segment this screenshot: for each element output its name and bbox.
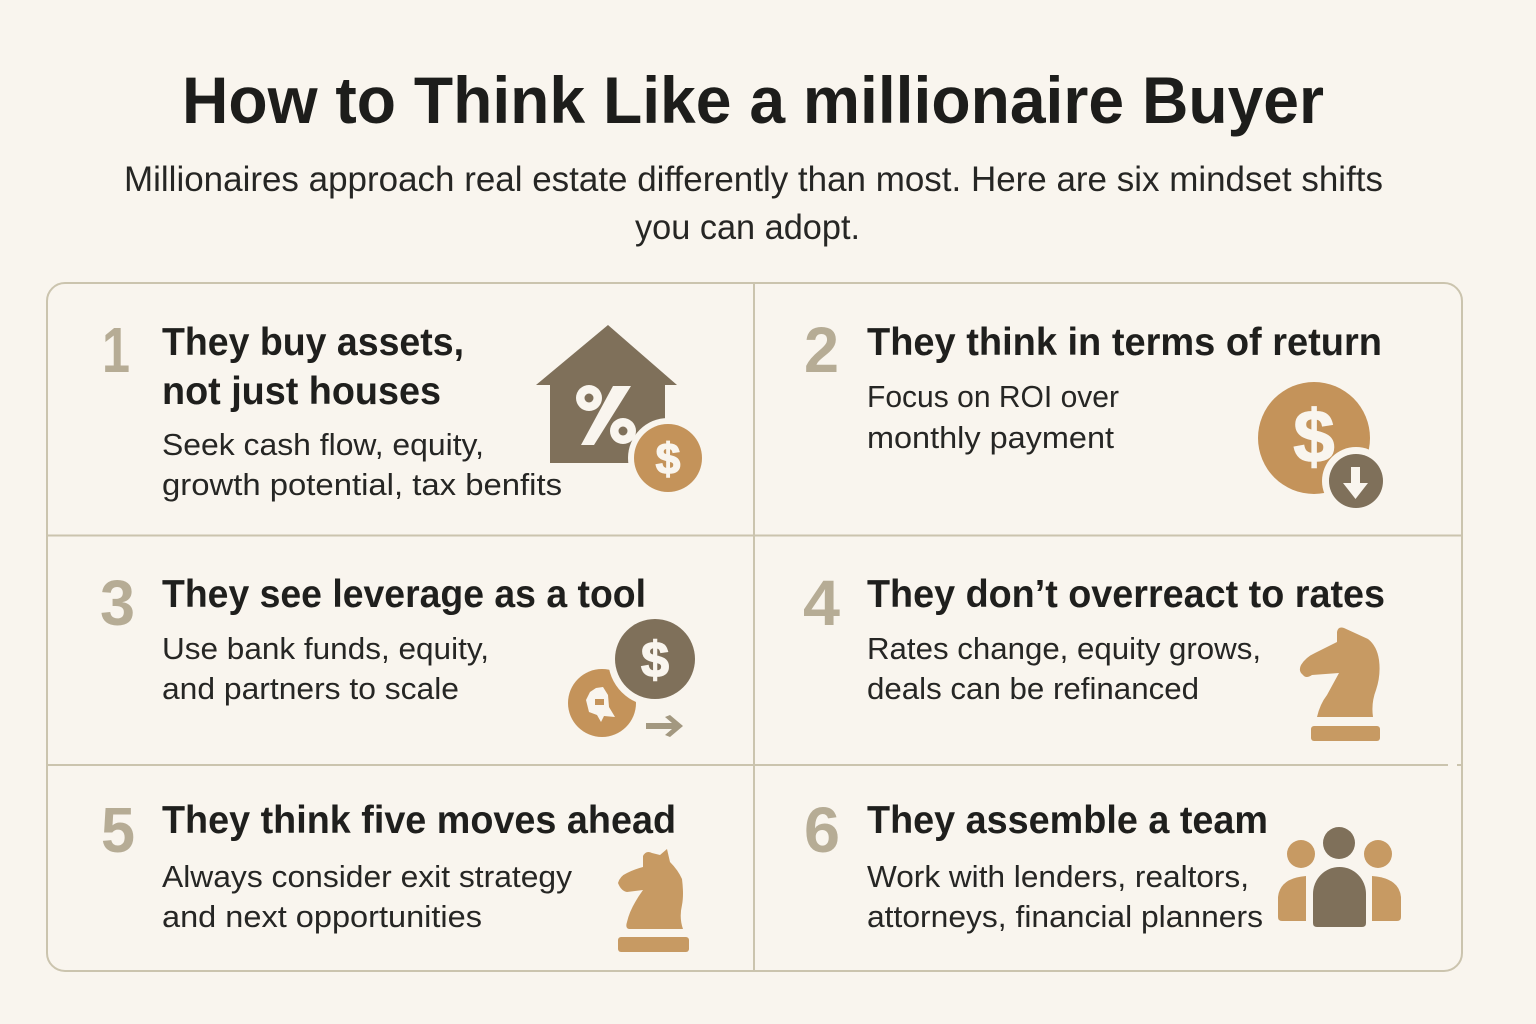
body 4: Rates change, equity grows,	[867, 631, 1261, 666]
icon: chess knight	[618, 849, 689, 952]
heading 1	[162, 321, 464, 413]
number 5: 5	[101, 794, 135, 866]
body 5: and next opportunities	[162, 899, 482, 934]
body 3: Use bank funds, equity,	[162, 631, 489, 666]
subtitle	[124, 160, 1383, 247]
icon: coin with down arrow	[1258, 382, 1390, 515]
number 4: 4	[803, 567, 840, 639]
panel 2: they think in terms of return	[804, 314, 1390, 515]
body 6: attorneys, financial planners	[867, 899, 1263, 934]
body 3: and partners to scale	[162, 671, 459, 706]
icon: two coins and arrow	[568, 612, 702, 737]
body 1: Seek cash flow, equity,	[162, 427, 484, 462]
body 5: Always consider exit strategy	[162, 859, 573, 894]
panel 4: they don't overreact to rates	[803, 567, 1385, 741]
body 4: deals can be refinanced	[867, 671, 1199, 706]
icon: team of three people	[1278, 827, 1401, 927]
subtitle: you can adopt.	[635, 208, 860, 247]
icon: house with percent and coin: $	[656, 435, 680, 484]
panel 3: they see leverage as a tool	[100, 567, 702, 737]
heading 2: They think in terms of return	[867, 321, 1382, 364]
number 2: 2	[804, 314, 839, 386]
icon: chess knight	[1300, 628, 1380, 741]
grid frame	[47, 283, 1462, 971]
body 2: monthly payment	[867, 420, 1114, 455]
heading 6: They assemble a team	[867, 799, 1268, 842]
body 2: Focus on ROI over	[867, 379, 1119, 414]
heading 1: not just houses	[162, 370, 441, 413]
body 1: growth potential, tax benfits	[162, 467, 562, 502]
heading 5: They think five moves ahead	[162, 799, 676, 842]
heading 1: They buy assets,	[162, 321, 464, 364]
heading 4: They don’t overreact to rates	[867, 573, 1385, 616]
number 1: 1	[102, 314, 130, 386]
panel 6: they assemble a team	[804, 794, 1401, 934]
body 6	[867, 859, 1263, 934]
subtitle: Millionaires approach real estate differently than most. Here are six mindset shifts	[124, 160, 1383, 199]
body 6: Work with lenders, realtors,	[867, 859, 1249, 894]
body 4	[867, 631, 1261, 706]
panel 5: they think five moves ahead	[101, 794, 689, 952]
body 2	[867, 379, 1119, 455]
panel 1: they buy assets	[102, 314, 708, 502]
body 5	[162, 859, 573, 934]
heading 3: They see leverage as a tool	[162, 573, 646, 616]
icon: two coins and arrow: $	[641, 632, 669, 688]
number 6: 6	[804, 794, 840, 866]
number 3: 3	[100, 567, 135, 639]
icon: house with percent and coin	[536, 325, 708, 498]
body 1	[162, 427, 562, 502]
body 3	[162, 631, 489, 706]
icon: coin with down arrow: $	[1293, 395, 1335, 478]
title: How to Think Like a millionaire Buyer	[182, 63, 1324, 137]
